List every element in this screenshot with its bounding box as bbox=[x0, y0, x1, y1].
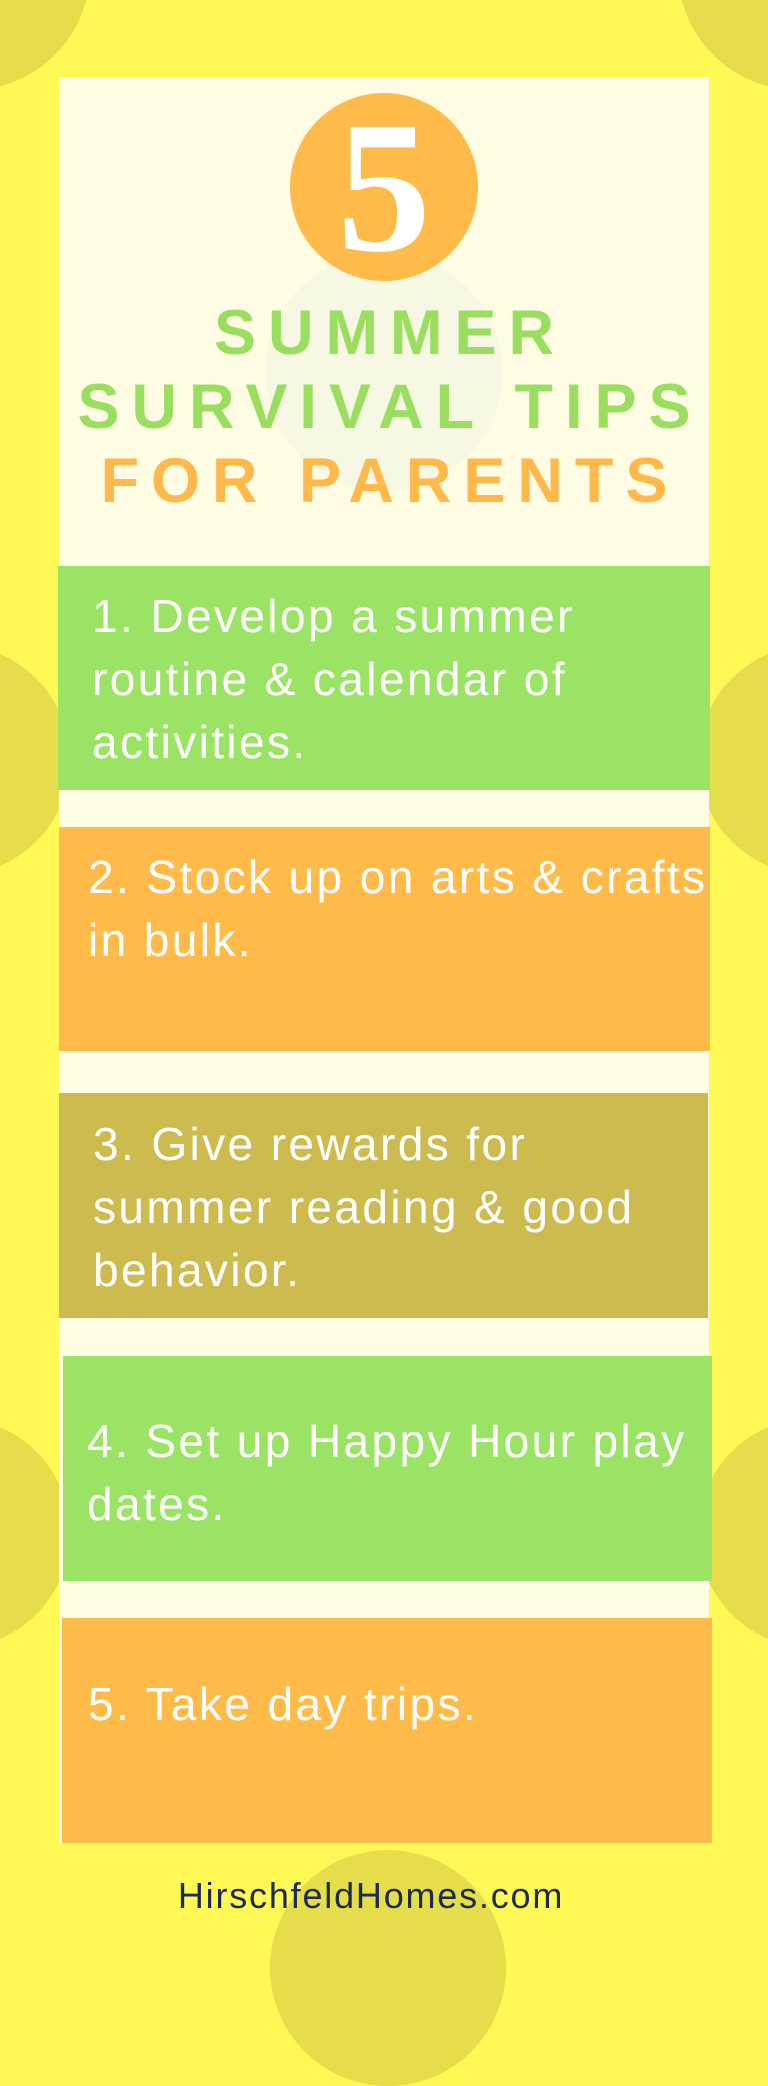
title: SUMMER bbox=[214, 298, 566, 368]
tip 2 bbox=[59, 827, 710, 1051]
tip 1: routine & calendar of bbox=[92, 653, 567, 705]
icon: number 5 circle bbox=[290, 93, 478, 281]
tip 2: 2. Stock up on arts & crafts bbox=[88, 851, 707, 903]
tip 5: 5. Take day trips. bbox=[88, 1678, 478, 1730]
tip 3: 3. Give rewards for bbox=[93, 1118, 527, 1170]
tip 3: summer reading & good bbox=[93, 1181, 634, 1233]
icon: number 5 circle: 5 bbox=[337, 82, 431, 291]
title bbox=[77, 298, 703, 516]
tip 4 bbox=[63, 1356, 712, 1581]
title: SURVIVAL TIPS bbox=[77, 372, 703, 442]
tip 2: in bulk. bbox=[88, 914, 253, 966]
tip 4: 4. Set up Happy Hour play bbox=[87, 1415, 687, 1467]
tip 4: dates. bbox=[87, 1478, 227, 1530]
footer: HirschfeldHomes.com bbox=[178, 1875, 564, 1916]
tip 5 bbox=[62, 1618, 712, 1843]
tip 1 bbox=[58, 566, 710, 790]
title: FOR PARENTS bbox=[101, 446, 679, 516]
faint title circle bbox=[265, 253, 503, 491]
tip 1: activities. bbox=[92, 716, 308, 768]
main panel bbox=[59, 77, 709, 1843]
tip 3: behavior. bbox=[93, 1244, 301, 1296]
tip 1: 1. Develop a summer bbox=[92, 590, 575, 642]
tip 3 bbox=[59, 1093, 708, 1318]
